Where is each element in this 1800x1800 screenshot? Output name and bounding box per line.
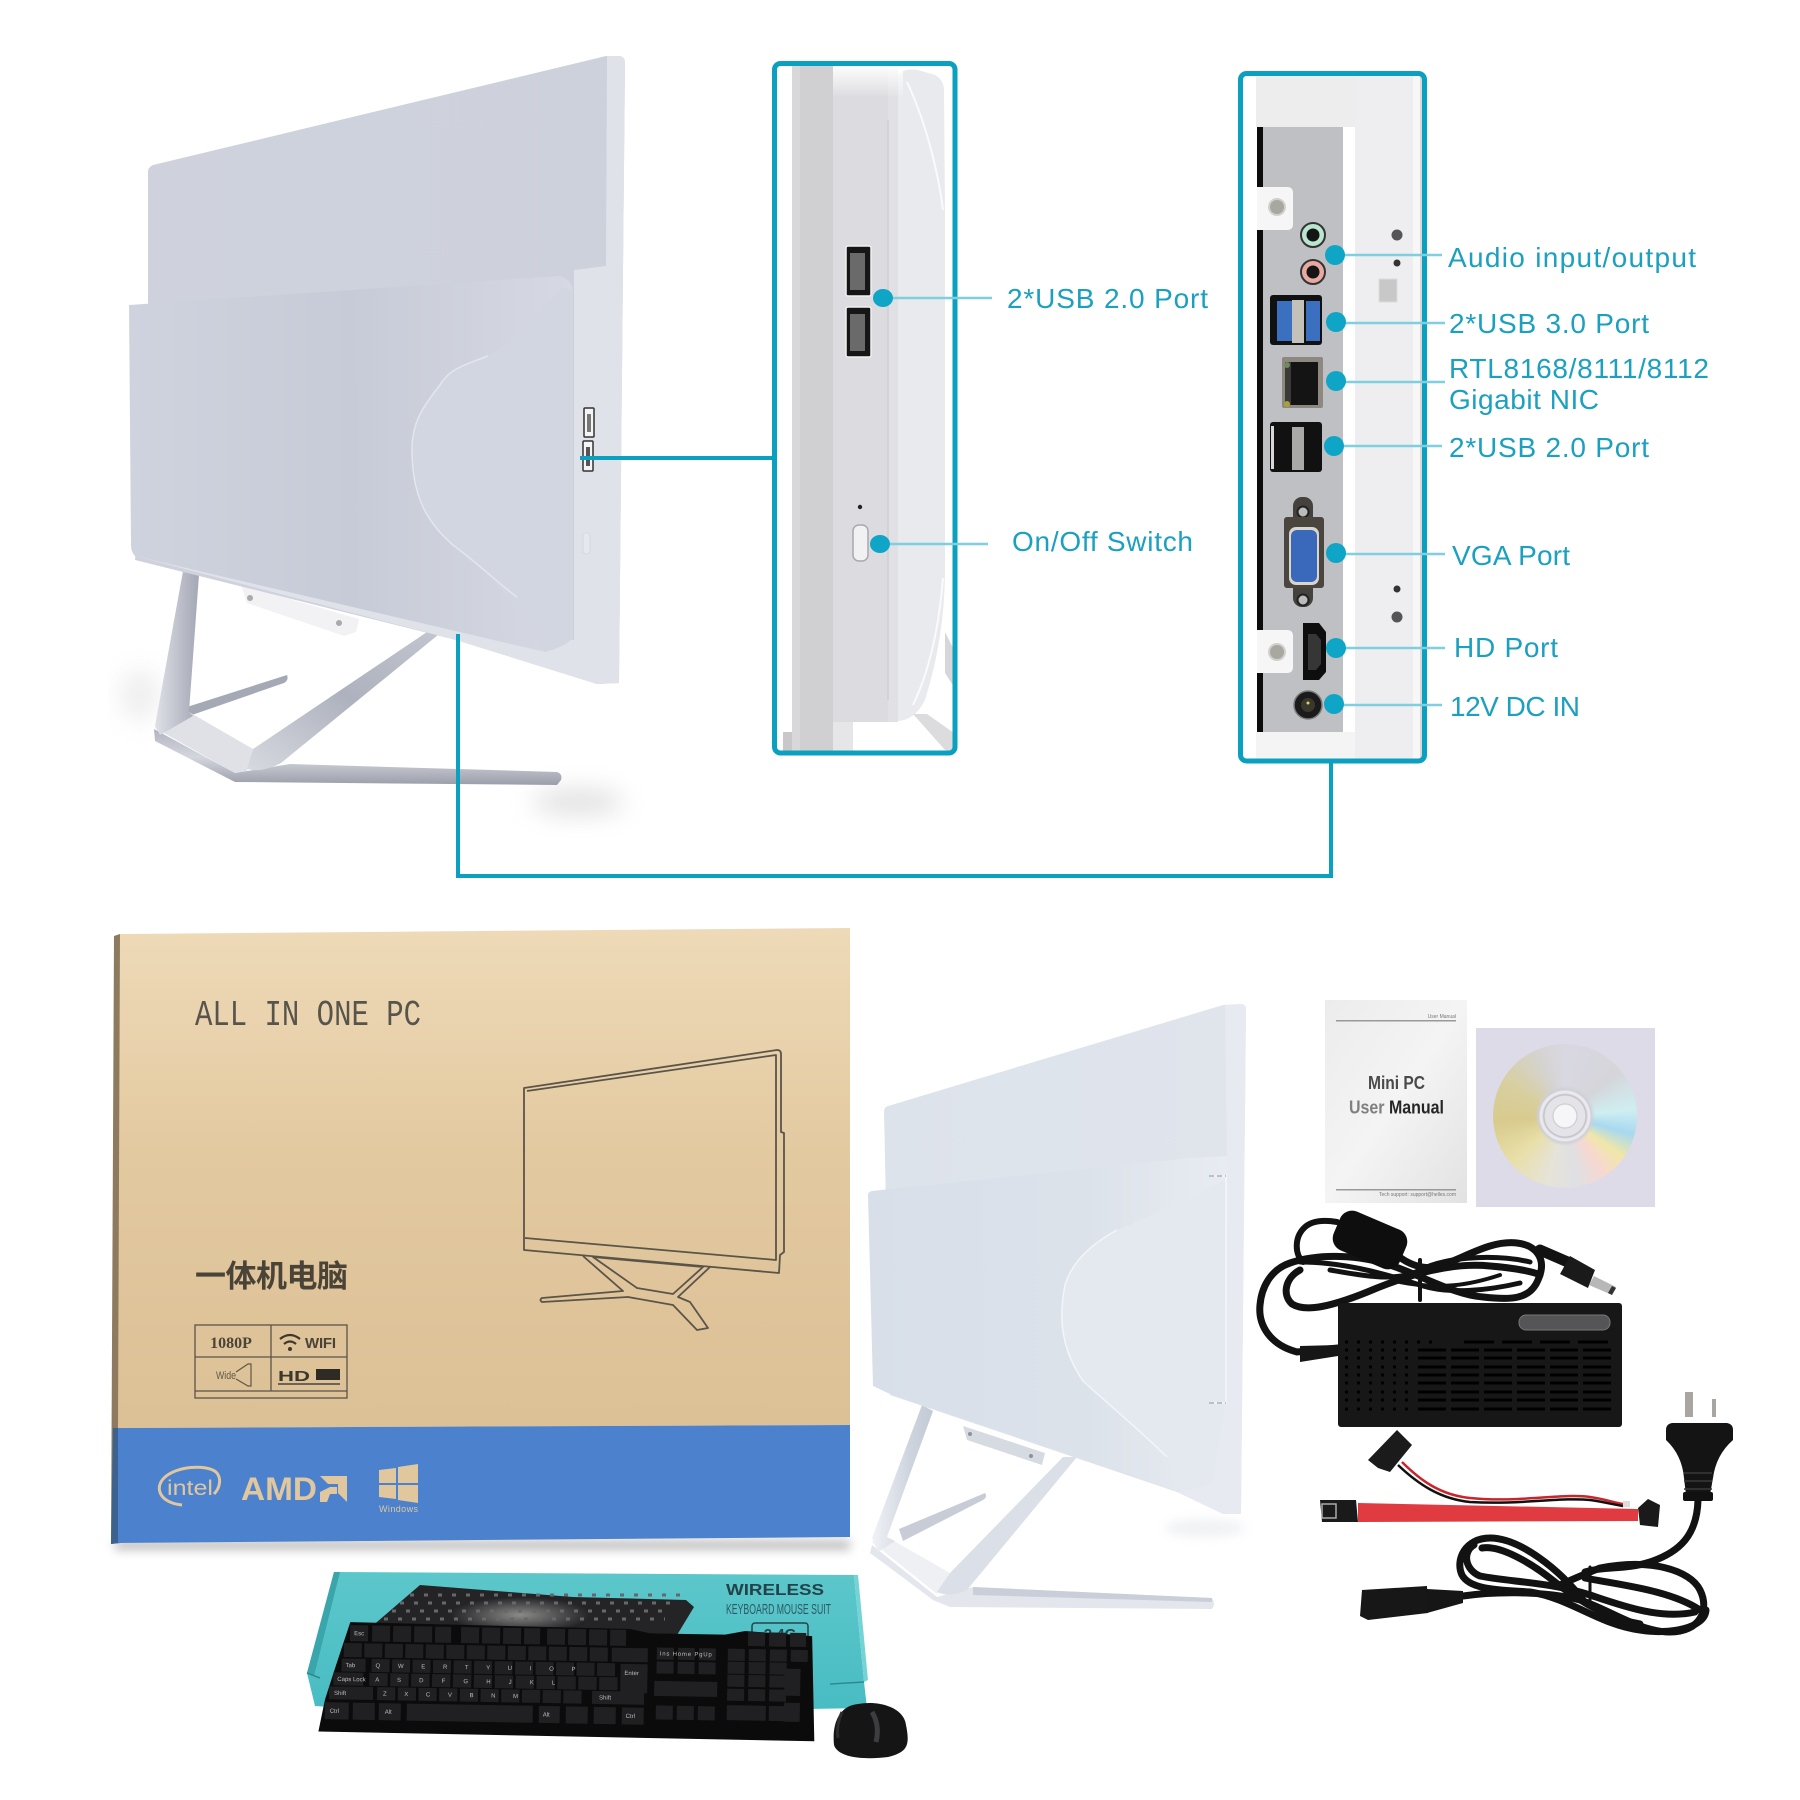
icon: audio jacks bbox=[1301, 223, 1325, 284]
logo: intel bbox=[159, 1467, 220, 1505]
icon: DC power jack bbox=[1294, 691, 1322, 719]
callout: 12V DC in bbox=[1324, 691, 1580, 722]
monitor: white rear cover bbox=[868, 1156, 1228, 1491]
spec table on box bbox=[195, 1325, 347, 1398]
callout: audio input/output bbox=[1325, 242, 1696, 273]
callout: side USB port bbox=[873, 283, 1208, 314]
logo: Windows bbox=[379, 1464, 418, 1514]
icon: USB 2.0 ports bbox=[1270, 422, 1322, 472]
user manual: Mini PC bbox=[1368, 1073, 1425, 1093]
callout: on/off switch bbox=[870, 526, 1193, 557]
CD disc bbox=[1493, 1044, 1637, 1188]
user manual bbox=[1325, 1000, 1467, 1203]
icon: VGA port bbox=[1284, 497, 1324, 607]
keyboard: Ins Home PgUp bbox=[660, 1651, 712, 1658]
keyboard: Alt bbox=[543, 1712, 550, 1719]
keyboard: Shift bbox=[334, 1691, 346, 1697]
panel: retail box bbox=[111, 928, 850, 1550]
keyboard bbox=[318, 1622, 816, 1741]
heading: ALL IN ONE PC: ALL IN ONE PC bbox=[195, 995, 421, 1036]
icon: power switch and LED bbox=[853, 505, 868, 561]
callout: VGA port bbox=[1326, 540, 1570, 571]
callout: gigabit NIC: RTL8168/8111/8112 bbox=[1449, 353, 1709, 384]
keyboard retail box: WIRELESS bbox=[726, 1582, 824, 1599]
heading: Chinese product name: 一体机电脑 bbox=[195, 1259, 348, 1294]
callout: USB 3.0 port bbox=[1326, 308, 1649, 339]
user manual: User Manual bbox=[1349, 1098, 1444, 1118]
panel: rear I/O zoom view bbox=[1240, 74, 1424, 762]
CD sleeve bbox=[1476, 1028, 1655, 1207]
adapter DC plug bbox=[1560, 1256, 1616, 1295]
icon: case holes bbox=[1379, 230, 1402, 622]
icon: mounting tabs and screws bbox=[1257, 187, 1293, 673]
keyboard retail box: KEYBOARD MOUSE SUIT bbox=[726, 1601, 831, 1618]
callout: HD port bbox=[1326, 632, 1558, 663]
keyboard: Enter bbox=[624, 1671, 639, 1677]
icon: monitor line drawing bbox=[524, 1050, 784, 1330]
callout: USB 2.0 port bbox=[1324, 432, 1649, 463]
mouse bbox=[834, 1703, 908, 1758]
keyboard: Shift bbox=[599, 1695, 611, 1702]
keyboard and mouse set bbox=[307, 1572, 908, 1758]
monitor: white rear view bbox=[868, 1004, 1246, 1609]
AC power cord bbox=[1360, 1392, 1733, 1632]
user manual: User Manual bbox=[1428, 1014, 1456, 1020]
keyboard: Tab bbox=[345, 1663, 356, 1669]
user manual: Tech support: support@helles.com bbox=[1379, 1192, 1456, 1198]
keyboard: A S D F G H J K L bbox=[375, 1678, 556, 1687]
connector lines from monitor to zoom panels bbox=[458, 458, 1331, 876]
adapter ferrite bead bbox=[1329, 1207, 1411, 1273]
logo: intel: intel bbox=[167, 1477, 213, 1500]
keyboard: Esc bbox=[354, 1631, 364, 1637]
monitor: rear cover bbox=[129, 276, 573, 652]
keyboard: Caps Lock bbox=[337, 1677, 367, 1683]
keyboard: Ctrl bbox=[626, 1714, 635, 1720]
icon: side USB ports bbox=[583, 408, 594, 554]
icon: HDMI port bbox=[1303, 623, 1326, 680]
spec table on box: 1080P bbox=[210, 1335, 252, 1352]
callout: 12V DC in: 12V DC IN bbox=[1450, 691, 1580, 722]
adapter cables bbox=[1260, 1221, 1570, 1352]
keyboard retail box bbox=[307, 1572, 868, 1715]
power adapter bbox=[1260, 1207, 1622, 1427]
callout: audio input/output: Audio input/output bbox=[1448, 242, 1696, 273]
keyboard retail box: 2.4G bbox=[764, 1626, 796, 1643]
logo: AMD: AMD bbox=[241, 1471, 317, 1507]
icon: USB ports, side view bbox=[846, 246, 871, 357]
spec table on box: Wide bbox=[216, 1370, 236, 1382]
callout: VGA port: VGA Port bbox=[1452, 540, 1570, 571]
logo: Windows: Windows bbox=[379, 1504, 418, 1514]
adapter brick bbox=[1300, 1303, 1622, 1427]
keyboard: Ctrl bbox=[330, 1709, 339, 1715]
callout: side USB port: 2*USB 2.0 Port bbox=[1007, 283, 1208, 314]
callout: on/off switch: On/Off Switch bbox=[1012, 526, 1193, 557]
callout: gigabit NIC: Gigabit NIC bbox=[1449, 384, 1599, 415]
spec table on box: WIFI bbox=[305, 1335, 336, 1352]
keyboard: Alt bbox=[385, 1710, 392, 1716]
monitor: main rear view bbox=[120, 56, 625, 816]
callout: USB 3.0 port: 2*USB 3.0 Port bbox=[1449, 308, 1649, 339]
callout: gigabit NIC bbox=[1326, 353, 1709, 415]
SATA data and power cables bbox=[1320, 1430, 1660, 1527]
keyboard: Q W E R T Y U I O P bbox=[375, 1664, 576, 1673]
icon: RJ45 network port bbox=[1282, 357, 1323, 408]
spec table on box: HD bbox=[278, 1368, 310, 1385]
keyboard: Z X C V B N M bbox=[383, 1692, 518, 1700]
callout: USB 2.0 port: 2*USB 2.0 Port bbox=[1449, 432, 1649, 463]
panel: side zoom view bbox=[774, 64, 955, 754]
callout: HD port: HD Port bbox=[1454, 632, 1558, 663]
icon: USB 3.0 ports bbox=[1270, 295, 1322, 345]
logo: AMD bbox=[241, 1471, 347, 1507]
